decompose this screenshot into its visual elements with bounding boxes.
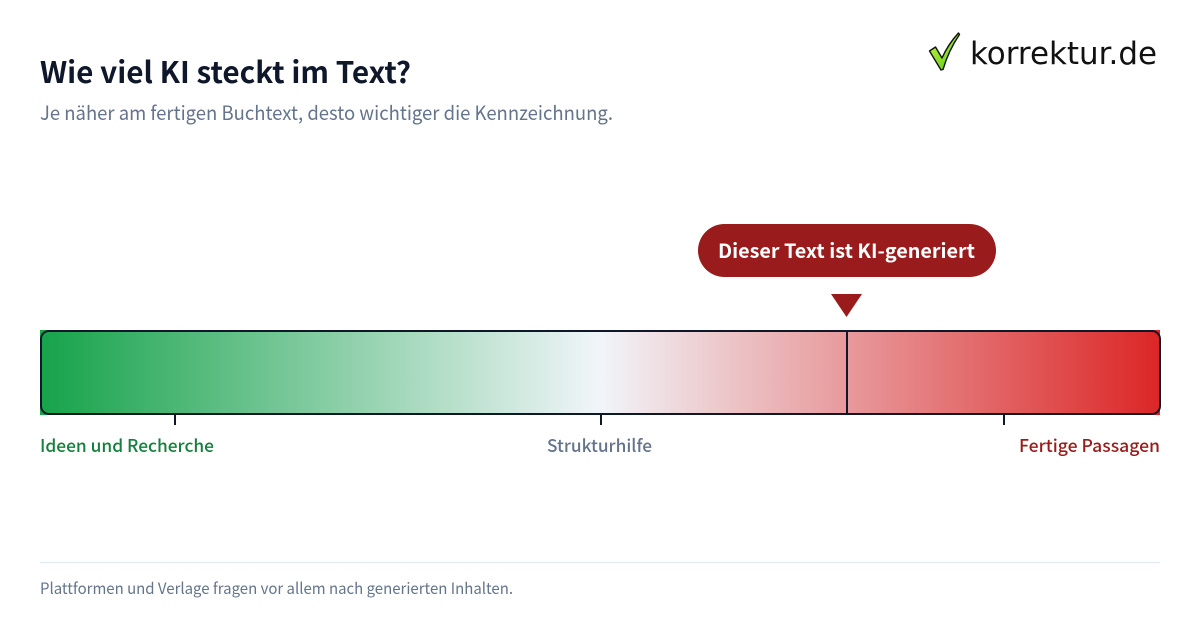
tick: Ideen und Recherche xyxy=(174,415,176,425)
label: Ideen und Recherche: Ideen und Recherche xyxy=(40,433,214,458)
marker line xyxy=(846,331,848,414)
gradient scale bar xyxy=(40,330,1160,415)
icon: green check mark xyxy=(930,33,960,70)
logo wordmark: korrektur.de xyxy=(970,36,1157,72)
logo: korrektur.de xyxy=(930,33,1157,72)
callout: KI-generated label: Dieser Text ist KI-generiert xyxy=(718,235,975,264)
label: Strukturhilfe: Strukturhilfe xyxy=(547,433,652,458)
title: Wie viel KI steckt im Text? xyxy=(40,50,411,92)
callout: KI-generated label xyxy=(698,224,996,277)
tick: Strukturhilfe xyxy=(600,415,602,425)
subtitle: Je näher am fertigen Buchtext, desto wichtiger die Kennzeichnung. xyxy=(40,97,613,126)
arrow: marker pointing to the scale xyxy=(831,294,862,317)
footer note: Plattformen und Verlage fragen vor allem nach generierten Inhalten. xyxy=(40,577,513,599)
tick: Fertige Passagen xyxy=(1003,415,1005,425)
label: Fertige Passagen: Fertige Passagen xyxy=(1019,433,1160,458)
